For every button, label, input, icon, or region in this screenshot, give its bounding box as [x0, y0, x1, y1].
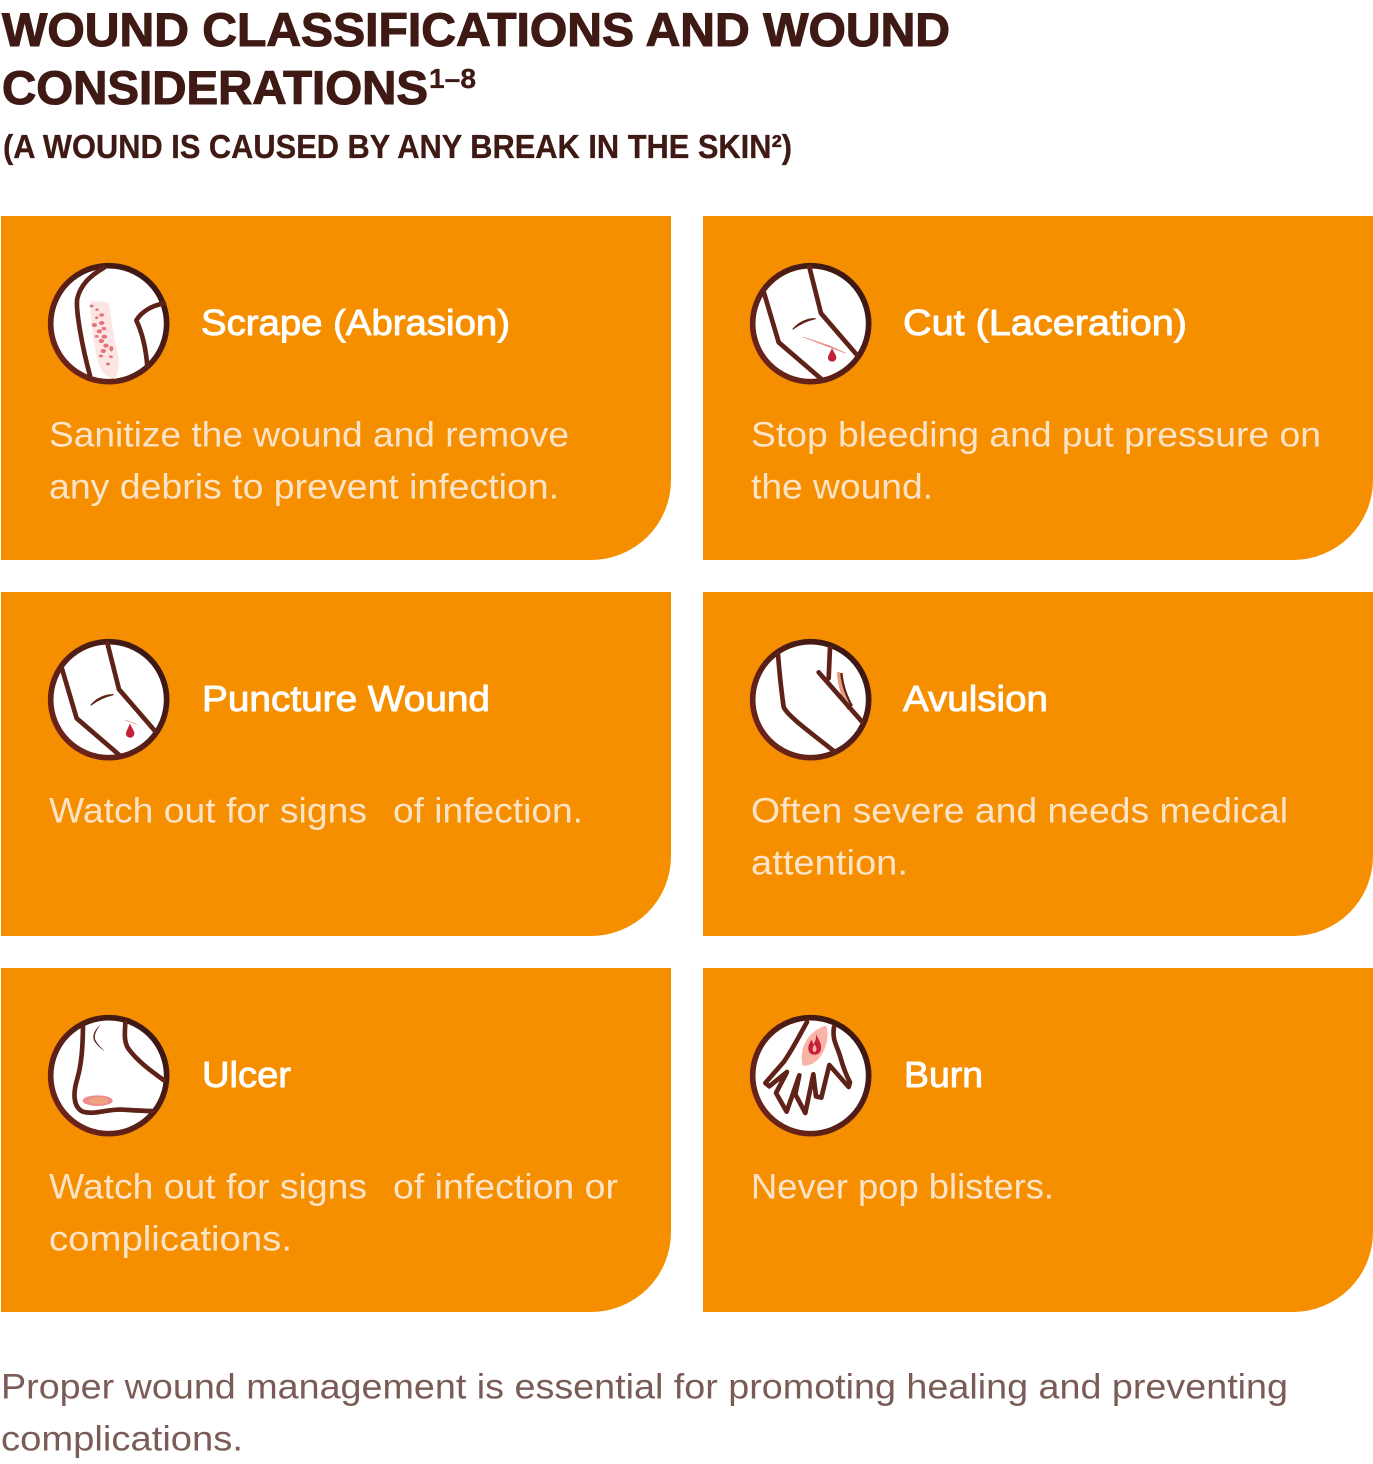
- icon: scrape on arm: [51, 266, 167, 382]
- heading: Avulsion: [903, 678, 1048, 719]
- text block: [751, 416, 1321, 506]
- text block: [49, 416, 569, 506]
- panel: ulcer: [1, 968, 671, 1312]
- panel: avulsion: [703, 592, 1373, 936]
- text block: Never pop blisters.: [751, 1168, 1054, 1206]
- panel: burn: [703, 968, 1373, 1312]
- text block: Watch out for signs: [49, 1168, 367, 1206]
- heading: Scrape (Abrasion): [201, 302, 510, 343]
- text block: of infection.: [393, 792, 583, 830]
- icon: cut on elbow: [753, 266, 869, 382]
- icon: avulsion on arm: [753, 642, 869, 758]
- title: WOUND CLASSIFICATIONS AND WOUND: [2, 3, 950, 56]
- text block: [751, 792, 1288, 882]
- heading: Ulcer: [202, 1054, 291, 1095]
- icon: ulcer on heel: [51, 1018, 167, 1134]
- closing note: [1, 1368, 1288, 1458]
- heading: Cut (Laceration): [903, 302, 1187, 343]
- text block: any debris to prevent infection.: [49, 468, 559, 506]
- text block: Sanitize the wound and remove: [49, 416, 569, 454]
- text block: complications.: [49, 1220, 292, 1258]
- text block: attention.: [751, 844, 908, 882]
- heading: Puncture Wound: [202, 678, 490, 719]
- title: [2, 3, 950, 114]
- text block: the wound.: [751, 468, 933, 506]
- panel: puncture: [1, 592, 671, 936]
- icon: burn on hand: [753, 1018, 869, 1134]
- text block: of infection or: [393, 1168, 618, 1206]
- panel: scrape: [1, 216, 671, 560]
- heading: Burn: [904, 1054, 983, 1095]
- text block: Watch out for signs: [49, 792, 367, 830]
- closing note: complications.: [1, 1420, 243, 1458]
- text block: Stop bleeding and put pressure on: [751, 416, 1321, 454]
- icon: puncture on elbow: [51, 642, 167, 758]
- title: CONSIDERATIONS: [2, 61, 428, 114]
- closing note: Proper wound management is essential for promoting healing and preventing: [1, 1368, 1288, 1406]
- subtitle: (A WOUND IS CAUSED BY ANY BREAK IN THE SKIN²): [3, 128, 792, 165]
- title: 1–8: [429, 63, 476, 94]
- text block: [49, 792, 583, 830]
- text block: [49, 1168, 618, 1258]
- panel: cut: [703, 216, 1373, 560]
- text block: Often severe and needs medical: [751, 792, 1288, 830]
